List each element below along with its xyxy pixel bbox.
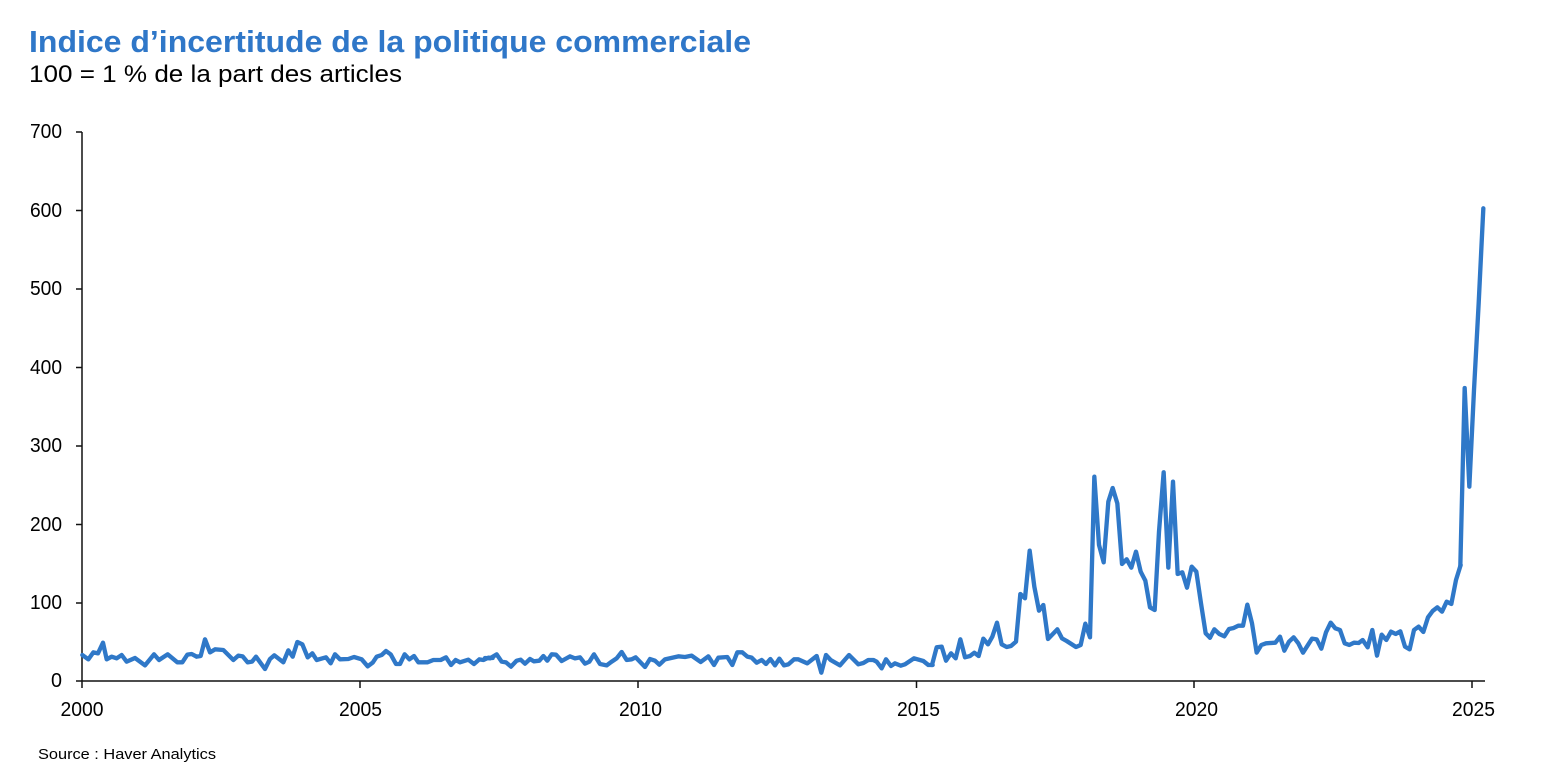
- y axis labels: 500: [30, 278, 62, 300]
- y axis labels: 600: [30, 200, 62, 222]
- y axis labels: 200: [30, 514, 62, 536]
- source note: Source : Haver Analytics: [38, 746, 216, 763]
- subtitle: 100 = 1 % de la part des articles: [29, 61, 402, 88]
- y axis labels: 700: [30, 121, 62, 143]
- y axis: [76, 132, 82, 681]
- x axis labels: [60, 699, 1495, 721]
- x axis labels: 2020: [1175, 699, 1218, 721]
- title: Indice d’incertitude de la politique commerciale: [29, 24, 751, 59]
- x axis labels: 2025: [1452, 699, 1495, 721]
- data series: trade policy uncertainty index: [82, 208, 1483, 673]
- y axis labels: 0: [51, 670, 62, 692]
- y axis labels: [30, 121, 62, 692]
- x axis labels: 2005: [339, 699, 382, 721]
- x axis labels: 2000: [60, 699, 104, 721]
- line chart: [30, 121, 1495, 721]
- x axis labels: 2010: [619, 699, 662, 721]
- y axis labels: 300: [30, 435, 62, 457]
- x axis labels: 2015: [897, 699, 940, 721]
- y axis labels: 400: [30, 357, 62, 379]
- y axis labels: 100: [30, 592, 62, 614]
- x axis: [76, 681, 1485, 688]
